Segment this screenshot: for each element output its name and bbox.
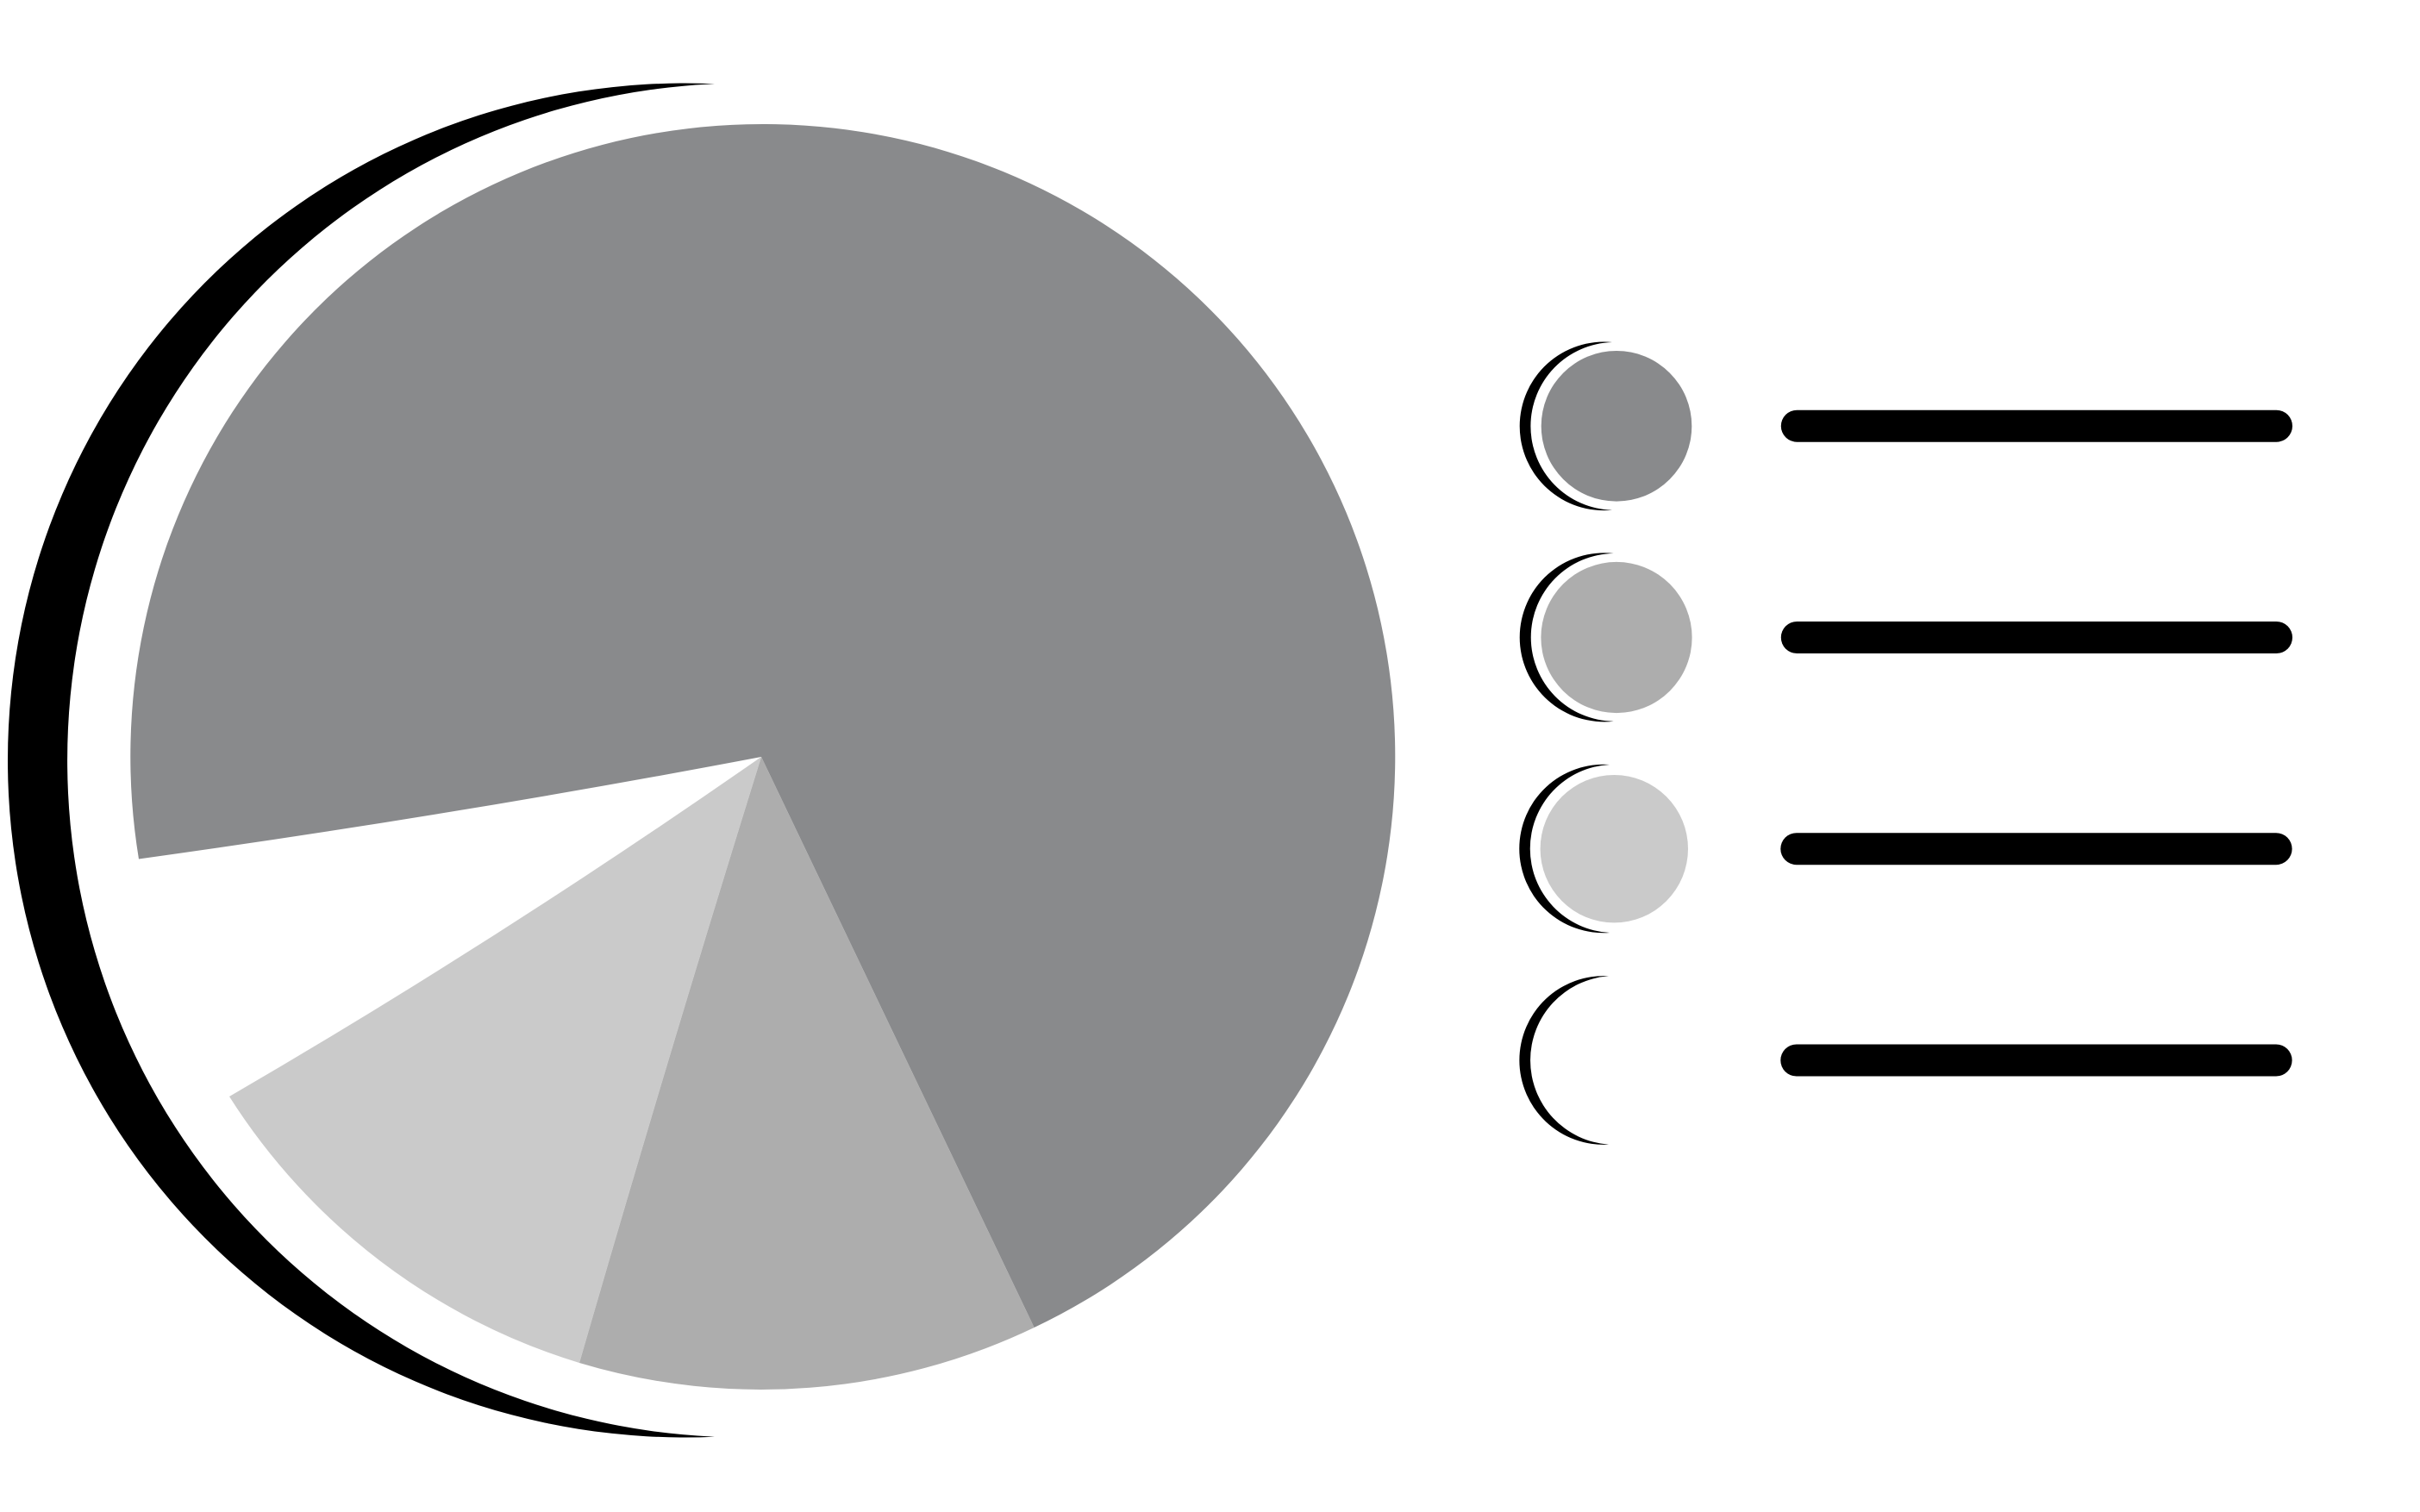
legend swatch: dark grey: [1541, 351, 1691, 502]
legend swatch: medium grey: [1541, 562, 1692, 713]
legend: [1519, 342, 2292, 1145]
pie slice: medium grey: [579, 757, 1035, 1390]
pie slice: light grey: [229, 757, 761, 1363]
pie slice: dark grey: [130, 124, 1395, 1328]
legend row 3: [1519, 765, 2292, 933]
legend placeholder bar 3: [1780, 833, 2292, 865]
legend swatch: light grey: [1541, 775, 1688, 922]
legend crescent 3: [1519, 765, 1610, 933]
legend placeholder bar 2: [1781, 622, 2292, 653]
legend row 4: [1519, 976, 2292, 1145]
legend crescent 4: [1519, 976, 1609, 1145]
black crescent around pie: [8, 84, 715, 1437]
legend crescent 2: [1520, 553, 1614, 722]
legend row 1: [1520, 342, 2292, 510]
legend placeholder bar 1: [1781, 410, 2292, 442]
legend placeholder bar 4: [1780, 1045, 2292, 1076]
legend row 2: [1520, 553, 2292, 722]
pie chart with crescent: [8, 84, 1395, 1437]
legend crescent 1: [1520, 342, 1612, 510]
